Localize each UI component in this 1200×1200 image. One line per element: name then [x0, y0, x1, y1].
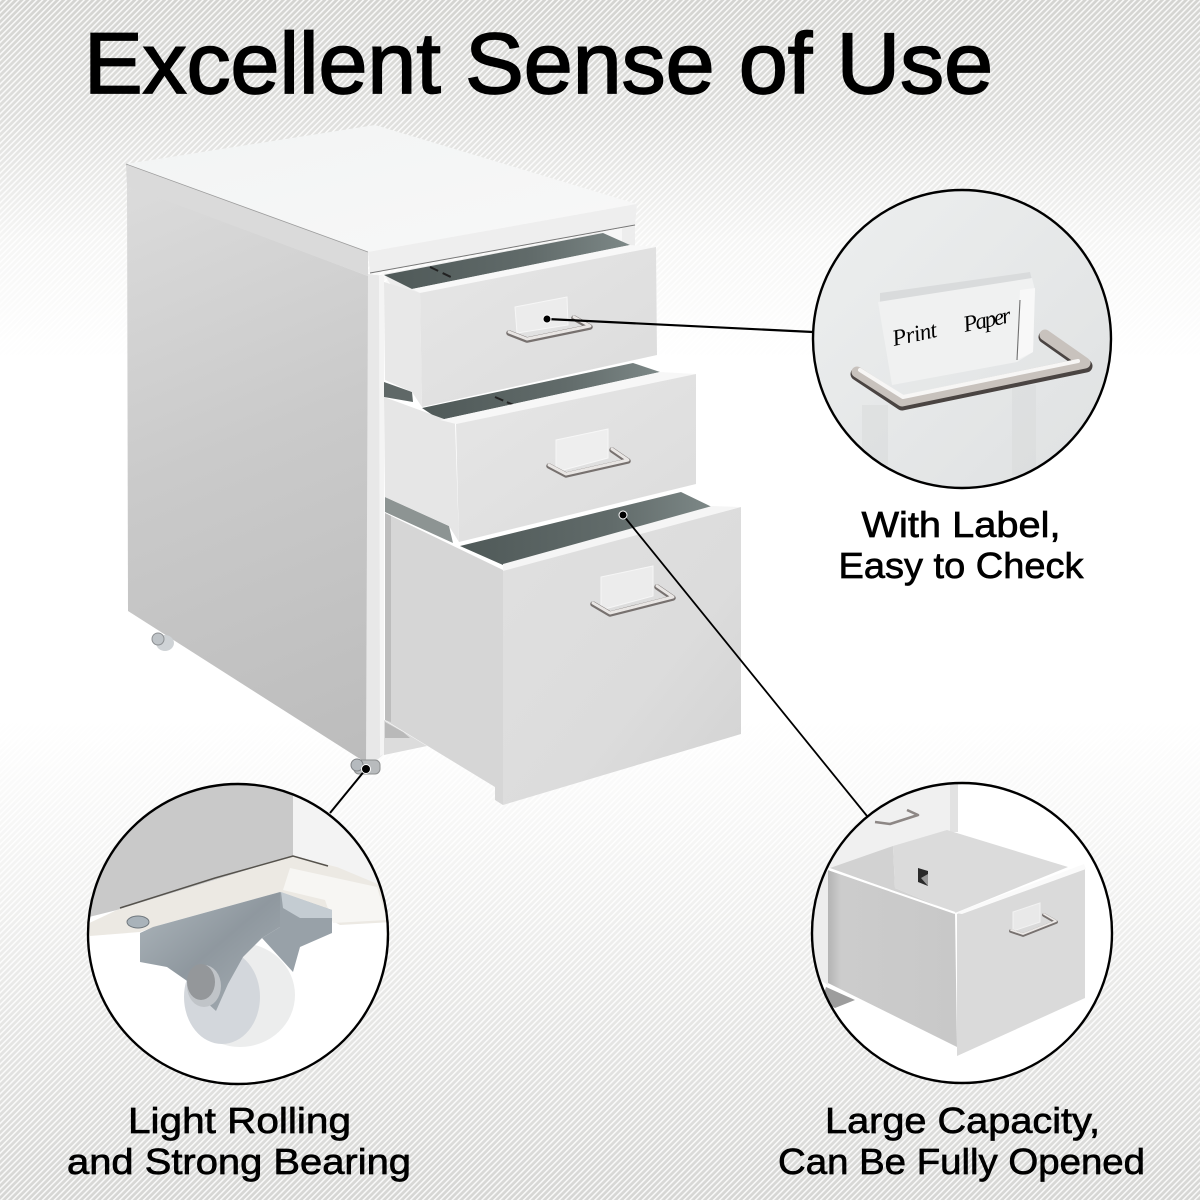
- title: Excellent Sense of Use: [84, 16, 993, 112]
- handwritten label text: Print: [889, 317, 940, 351]
- circle: open drawer detail: [810, 780, 1112, 1083]
- circle: caster detail: [80, 780, 400, 1084]
- wheel: [184, 943, 295, 1047]
- front column: [366, 274, 384, 766]
- handle: drawer 3: [593, 566, 673, 614]
- caster: rear: [152, 633, 174, 651]
- cabinet top surface: [126, 125, 637, 252]
- cabinet top edge: [126, 164, 368, 276]
- caption: label: [838, 504, 1084, 586]
- runner below drawer: [822, 987, 855, 1008]
- bracket right arm: [262, 892, 332, 972]
- bracket front plate: [140, 892, 280, 1011]
- upper drawer handle: [875, 810, 918, 824]
- cabinet side panel: [127, 185, 368, 764]
- handle: drawer 1: [509, 297, 590, 340]
- cabinet underside: [85, 856, 392, 936]
- interior hole: [918, 868, 928, 886]
- circle: label holder detail: Paper: [960, 302, 1014, 337]
- drawer 2: [384, 363, 696, 542]
- handle: drawer 2: [549, 429, 628, 475]
- caption: capacity: [778, 1100, 1145, 1182]
- caption: caster: and Strong Bearing: [67, 1141, 411, 1182]
- cabinet side in close-up: [80, 780, 293, 918]
- cabinet behind drawer: [828, 785, 950, 868]
- drawer handle: [1011, 903, 1056, 935]
- chrome handle: [857, 337, 1086, 404]
- drawer 3: [385, 492, 741, 805]
- rear opening: [384, 226, 635, 300]
- callout line: label: [543, 315, 813, 332]
- drawer 1: [384, 233, 657, 407]
- drawer interior: [830, 846, 938, 906]
- caption: capacity: Can Be Fully Opened: [778, 1141, 1145, 1182]
- filing cabinet: [126, 125, 741, 805]
- caption: caster: [67, 1100, 411, 1182]
- caption: capacity: Large Capacity,: [825, 1100, 1100, 1141]
- caption: caster: Light Rolling: [128, 1100, 351, 1141]
- bolt: [127, 916, 149, 928]
- callout line: capacity: [619, 511, 867, 816]
- lower recess: [384, 720, 427, 755]
- caster: front: [351, 759, 380, 774]
- caption: label: With Label,: [862, 504, 1060, 545]
- callout line: caster: [330, 764, 370, 813]
- drawer front face: [957, 867, 1085, 1056]
- circle: label holder detail: [813, 190, 1111, 488]
- drawer left face: [828, 870, 957, 1047]
- soft shadows: [862, 405, 888, 465]
- hub: [187, 965, 221, 1007]
- caption: label: Easy to Check: [838, 545, 1084, 586]
- label plate: [880, 272, 1032, 302]
